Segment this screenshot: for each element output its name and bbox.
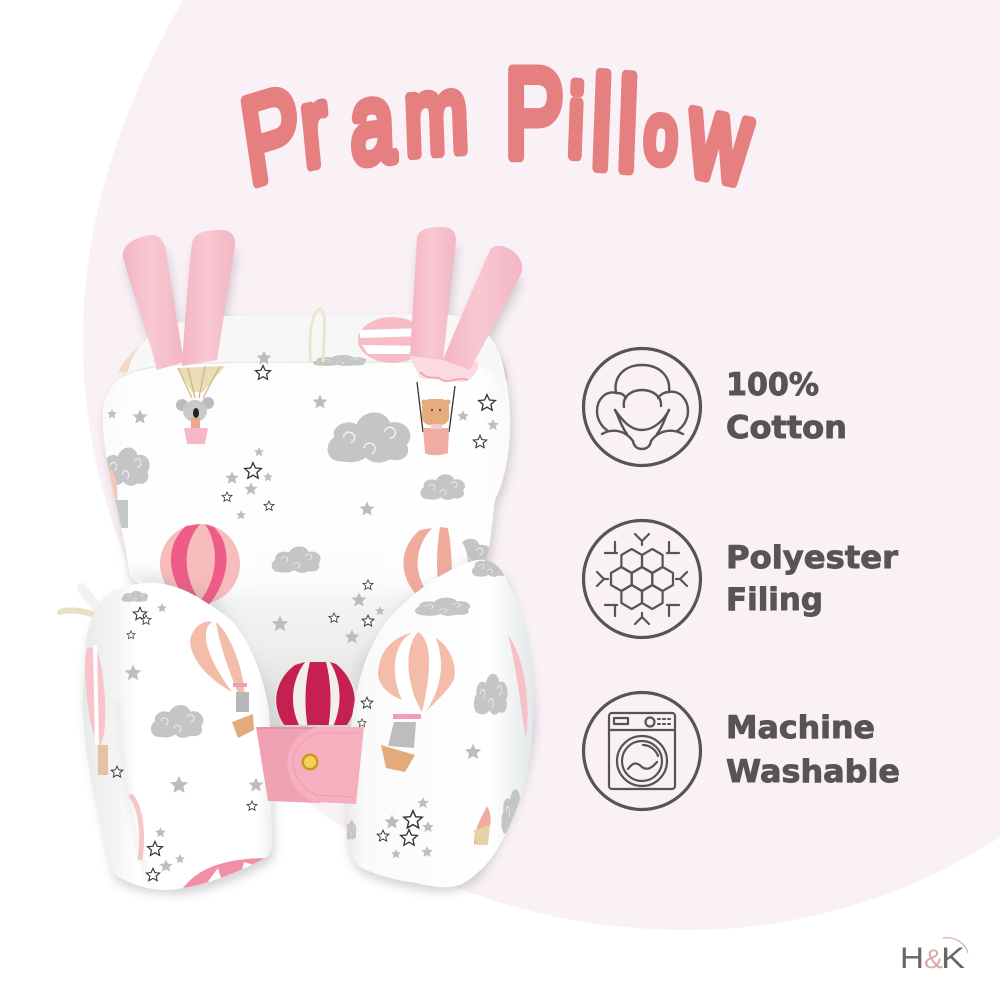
logo: H&K: H: [900, 942, 924, 975]
bottom pink balloon print: [183, 858, 265, 888]
title: a: [348, 60, 397, 187]
side ribbon loops: [60, 588, 104, 620]
fold at the top: [131, 348, 505, 374]
icon: washing machine: [584, 692, 700, 810]
clouds and stars on left cushion: [151, 705, 203, 738]
logo: H&K: [900, 938, 968, 975]
title: [234, 45, 758, 211]
balloon print: hot pink: [160, 524, 240, 606]
label: Filing: [726, 582, 823, 618]
shadows cast on back cushion: [130, 555, 480, 730]
clouds and stars on right cushion: [415, 598, 470, 616]
title: r: [296, 64, 333, 191]
left side cushion: [78, 578, 278, 900]
title: P: [505, 45, 564, 185]
soft shadow: [85, 241, 535, 894]
left strap tab 2: [182, 230, 235, 366]
koala in basket print: [176, 366, 225, 444]
cloud prints: [328, 413, 410, 463]
right side cushion: [340, 555, 540, 895]
title: i: [566, 66, 586, 178]
star prints on back cushion: [107, 350, 499, 643]
feature: polyester filing: [584, 520, 899, 638]
left strap tab 1: [123, 235, 184, 370]
feature: machine washable: [584, 692, 900, 810]
balloon print: top right: [358, 317, 478, 382]
label: Cotton: [726, 410, 847, 446]
snap button: [302, 754, 318, 770]
logo: H&K: &: [924, 944, 943, 974]
tall peach balloon with bunny print: [378, 632, 455, 772]
pink stripe balloon print on edge: [85, 647, 105, 745]
title: P: [234, 62, 309, 211]
right strap tab 4: [443, 246, 522, 370]
label: Washable: [726, 754, 900, 790]
icon: honeycomb fibres: [584, 520, 700, 638]
title: l: [615, 51, 641, 198]
title: m: [402, 53, 491, 178]
bear in basket print: [417, 382, 455, 455]
balloon print: crimson: [275, 662, 356, 725]
balloon print: peach: [402, 527, 468, 599]
title: o: [642, 86, 680, 182]
label: 100%: [726, 367, 819, 403]
title: l: [589, 49, 615, 196]
tall peach balloon print: [190, 622, 254, 738]
edge balloon prints: [508, 635, 528, 740]
icon: cotton boll: [584, 348, 700, 466]
pram pillow product: [60, 227, 540, 900]
back tan balloon behind the top: [118, 316, 230, 380]
label: Polyester: [726, 540, 899, 576]
logo: H&K: K: [941, 942, 965, 975]
right strap tab 3: [410, 227, 456, 360]
main back cushion: [95, 305, 520, 738]
strap with snap button: [256, 727, 364, 804]
label: Machine: [726, 710, 875, 746]
partial peach balloon and rabbit print on left edge: [108, 468, 118, 505]
feature: 100% cotton: [584, 348, 847, 466]
title: w: [683, 65, 758, 210]
hanging loop: [310, 309, 324, 362]
